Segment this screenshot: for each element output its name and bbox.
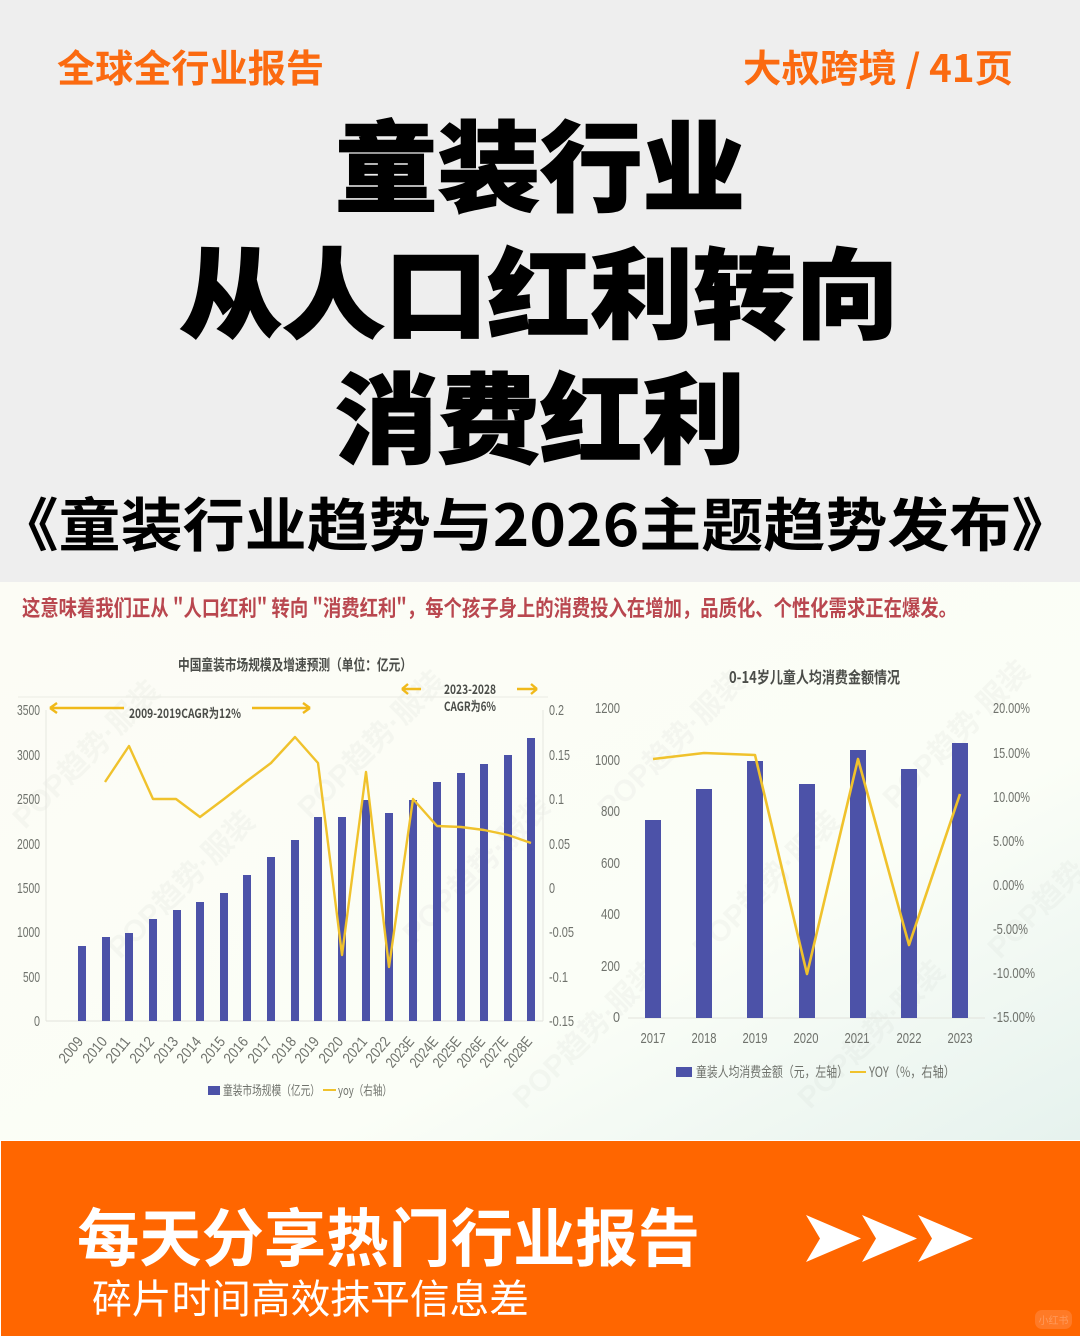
x axis labels: 2011 [102, 1034, 134, 1067]
right axis labels: 0 [549, 880, 555, 897]
right axis labels: -0.1 [549, 969, 568, 986]
right axis labels: 5.00% [993, 833, 1024, 850]
x axis labels: 2014 [173, 1034, 205, 1067]
x axis labels: 2013 [150, 1034, 182, 1067]
label: author and page count: 大叔跨境 / 41页 [743, 38, 1013, 93]
banner: daily report call to action [0, 1140, 1080, 1336]
right axis labels: -5.00% [993, 921, 1028, 938]
watermarks: POP趋势·服装 [877, 655, 1037, 815]
legend: yoy（右轴） [338, 1080, 392, 1099]
x axis labels: 2015 [197, 1034, 229, 1067]
line: YOY [653, 753, 960, 974]
title: 消费红利 [335, 342, 745, 484]
icon: platform watermark: 小红书 [1038, 1312, 1068, 1327]
annotation: 2023-2028 CAGR [402, 679, 537, 715]
title: 童装行业 [335, 90, 745, 232]
legend: YOY（%，右轴） [868, 1062, 955, 1082]
left axis labels: 1000 [17, 924, 40, 941]
x axis labels: 2016 [220, 1034, 252, 1067]
watermarks: POP趋势·服装 [7, 675, 167, 835]
watermarks: POP趋势·服装 [102, 805, 262, 965]
watermarks: POP趋势·服装 [507, 955, 667, 1115]
right axis labels: -15.00% [993, 1009, 1035, 1026]
left axis labels: 400 [601, 906, 620, 923]
left axis labels [595, 700, 620, 1026]
watermarks: POP趋势·服装 [792, 955, 952, 1115]
icon: platform watermark [1035, 1310, 1072, 1329]
x axis labels [55, 1034, 536, 1071]
bars: market size [78, 738, 535, 1021]
left axis labels: 0 [34, 1013, 40, 1030]
x axis labels: 2010 [79, 1034, 111, 1067]
right axis labels: -0.05 [549, 924, 574, 941]
left axis labels: 200 [601, 958, 620, 975]
subtitle: 《童装行业趋势与2026主题趋势发布》 [0, 479, 1074, 563]
legend: 童装人均消费金额（元，左轴） [696, 1062, 848, 1082]
x axis labels: 2018 [692, 1030, 716, 1047]
watermarks: POP趋势·服装 [592, 665, 752, 825]
chart title: 中国童装市场规模及增速预测（单位：亿元） [178, 654, 412, 675]
chart: China childrenswear market size and growth [17, 654, 574, 1099]
right axis labels: 10.00% [993, 789, 1030, 806]
right axis labels: -0.15 [549, 1013, 574, 1030]
banner subline: 碎片时间高效抹平信息差 [92, 1267, 529, 1325]
line: yoy [105, 737, 531, 967]
x axis labels: 2020 [315, 1034, 347, 1067]
x axis labels: 2025E [430, 1034, 465, 1071]
annotation: 2023-2028 CAGR: CAGR为6% [444, 696, 496, 715]
title [180, 90, 898, 484]
x axis labels: 2017 [640, 1030, 666, 1047]
x axis labels: 2022 [362, 1034, 394, 1067]
x axis labels: 2017 [244, 1034, 276, 1067]
right axis labels: 15.00% [993, 745, 1030, 762]
left axis labels: 800 [601, 803, 620, 820]
left axis labels: 1000 [595, 752, 620, 769]
left axis labels: 2000 [17, 836, 40, 853]
x axis labels: 2020 [794, 1030, 818, 1047]
right axis labels: 20.00% [993, 700, 1030, 717]
right axis labels [549, 702, 574, 1030]
x axis labels: 2021 [339, 1034, 371, 1067]
annotation: 2009-2019 CAGR: 2009-2019CAGR为12% [129, 703, 241, 722]
header background [0, 0, 1080, 582]
x axis labels: 2022 [896, 1030, 922, 1047]
left axis labels: 0 [613, 1009, 620, 1026]
right axis labels: 0.05 [549, 836, 570, 853]
label: report category: 全球全行业报告 [57, 38, 324, 93]
left axis labels [17, 702, 40, 1030]
right axis labels: 0.2 [549, 702, 564, 719]
right axis labels [993, 700, 1035, 1026]
left axis labels: 3000 [17, 747, 40, 764]
left axis labels: 2500 [17, 791, 40, 808]
x axis labels: 2019 [291, 1034, 323, 1067]
left axis labels: 600 [601, 855, 620, 872]
watermarks [7, 655, 1080, 1115]
watermarks: POP趋势·服装 [687, 805, 847, 965]
x axis labels: 2023 [948, 1030, 972, 1047]
right axis labels: 0.15 [549, 747, 570, 764]
left axis labels: 3500 [17, 702, 40, 719]
watermarks: POP趋势·服装 [397, 790, 557, 950]
chart title: 0-14岁儿童人均消费金额情况 [729, 664, 900, 688]
title: 从人口红利转向 [180, 217, 898, 359]
x axis labels [640, 1030, 972, 1047]
x axis labels: 2027E [477, 1034, 512, 1071]
chart: per-capita spending ages 0-14 [595, 664, 1035, 1082]
right axis labels: -10.00% [993, 965, 1035, 982]
left axis labels: 1500 [17, 880, 40, 897]
x axis labels: 2028E [501, 1034, 536, 1071]
watermarks: POP趋势·服装 [292, 665, 452, 825]
x axis labels: 2026E [454, 1034, 489, 1071]
annotation: 2023-2028 CAGR: 2023-2028 [444, 679, 496, 698]
right axis labels: 0.1 [549, 791, 564, 808]
bars: per-capita spending [645, 743, 968, 1018]
x axis labels: 2019 [742, 1030, 768, 1047]
x axis labels: 2024E [407, 1034, 442, 1071]
x axis labels: 2023E [383, 1034, 418, 1071]
panel: charts background [0, 582, 1080, 1141]
x axis labels: 2012 [126, 1034, 158, 1067]
left axis labels: 1200 [595, 700, 620, 717]
x axis labels: 2021 [844, 1030, 870, 1047]
annotation: 2009-2019 CAGR [50, 703, 310, 722]
x axis labels: 2018 [268, 1034, 300, 1067]
banner headline: 每天分享热门行业报告 [77, 1189, 700, 1280]
right axis labels: 0.00% [993, 877, 1024, 894]
left axis labels: 500 [23, 969, 40, 986]
x axis labels: 2009 [55, 1034, 87, 1067]
icon: triple arrows [806, 1215, 973, 1262]
legend: 童装市场规模（亿元） [223, 1080, 320, 1099]
